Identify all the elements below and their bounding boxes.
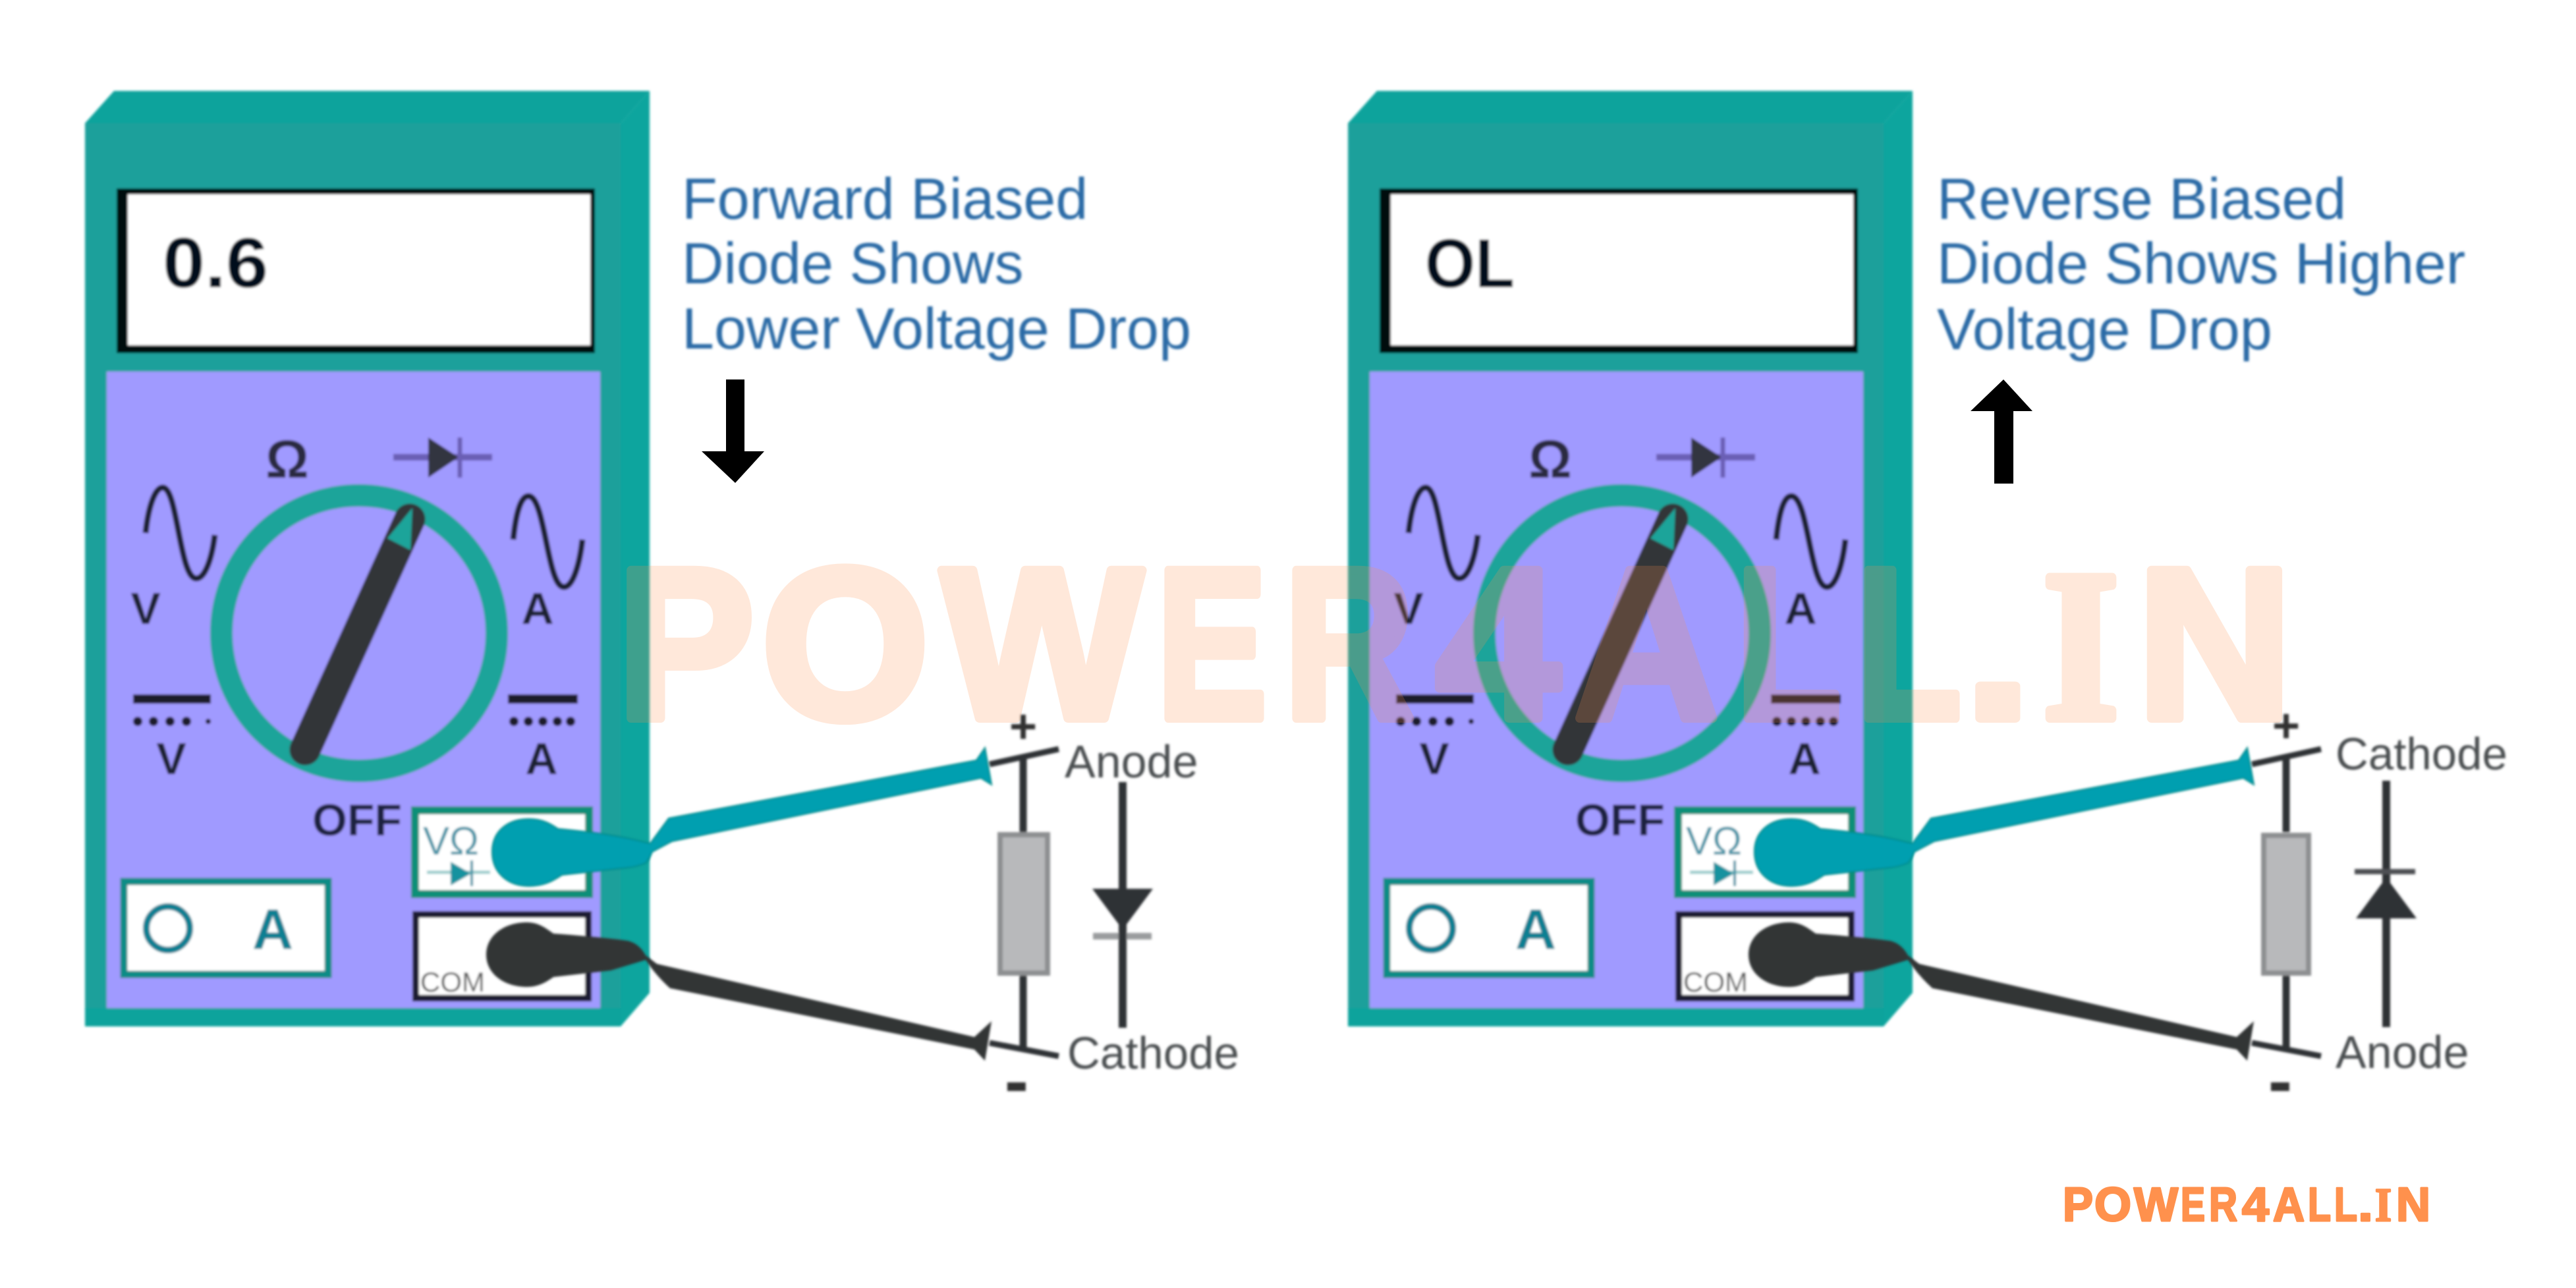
wires and resistor (990, 749, 1059, 1056)
10A socket box (124, 882, 328, 974)
DC voltage range (1396, 694, 1474, 784)
display showing OL: OL (1425, 225, 1515, 302)
DC current range: A (525, 734, 558, 784)
V-ohm socket box: VΩ (423, 819, 479, 863)
ohm symbol: Ω (1528, 430, 1572, 490)
footer brand: L (2334, 1179, 2357, 1231)
DC voltage range (133, 694, 211, 784)
Anode label: Anode (2336, 1026, 2469, 1078)
rotary dial (221, 495, 497, 771)
COM socket box: COM (1683, 966, 1748, 997)
OFF label: OFF (1575, 795, 1665, 845)
watermark: . (1964, 524, 2032, 764)
AC voltage range: V (1393, 584, 1424, 634)
AC voltage range (1393, 488, 1478, 634)
arrow: voltage down (702, 379, 764, 483)
diode range symbol (393, 437, 492, 478)
rotary dial (1484, 495, 1760, 771)
footer brand: O (2094, 1179, 2131, 1231)
AC current range: A (521, 584, 554, 634)
text: reverse biased caption: Diode Shows Higher (1937, 231, 2465, 296)
footer brand: N (2396, 1179, 2430, 1231)
watermark: 4 (1436, 524, 1561, 764)
text: reverse biased caption (1937, 166, 2465, 362)
V-ohm socket box: VΩ (1686, 819, 1742, 863)
text: forward biased caption: Forward Biased (682, 166, 1088, 231)
AC current range (1776, 496, 1845, 634)
Cathode label: Cathode (1067, 1028, 1239, 1078)
footer brand: L (2308, 1179, 2331, 1231)
watermark: L (1857, 524, 1961, 764)
footer brand: R (2209, 1179, 2237, 1231)
10A socket box (1387, 882, 1591, 974)
DC current range (1771, 694, 1841, 784)
meter body (1348, 91, 1913, 1026)
DC current range (508, 694, 578, 784)
watermark: N (2137, 524, 2292, 764)
10A socket box: A (1515, 898, 1556, 961)
Anode label: Anode (1065, 736, 1198, 787)
panel: reverse biased multimeter (1348, 91, 1913, 1026)
V-ohm socket box (1678, 810, 1852, 894)
control panel (1370, 372, 1863, 1008)
COM socket box (1679, 914, 1851, 998)
display showing 0.6: 0.6 (163, 223, 268, 302)
DC voltage range: V (156, 734, 186, 784)
text: forward biased caption: Lower Voltage Drop (682, 296, 1191, 361)
control panel (107, 372, 600, 1008)
diode symbol pointing up (2355, 781, 2417, 1027)
circuit: forward biased probes and diode (486, 700, 1239, 1121)
minus sign: - (1005, 1040, 1028, 1121)
watermark: I (2043, 526, 2119, 765)
watermark: R (1284, 524, 1414, 764)
display showing OL (1380, 188, 1858, 353)
panel: forward biased multimeter (85, 91, 650, 1026)
footer brand: E (2181, 1179, 2205, 1231)
Cathode label: Cathode (2336, 729, 2507, 779)
text: forward biased caption (682, 166, 1191, 361)
black probe plug and lead (486, 922, 992, 1061)
watermark: O (762, 524, 929, 764)
red probe plug and lead (492, 748, 992, 886)
footer brand: P (2063, 1179, 2093, 1231)
DC current range: A (1788, 734, 1821, 784)
text: forward biased caption: Diode Shows (682, 231, 1024, 296)
meter body (85, 91, 650, 1026)
diode symbol pointing down (1092, 782, 1153, 1028)
ohm symbol: Ω (266, 430, 309, 490)
OFF label: OFF (312, 795, 402, 845)
watermark: P (617, 524, 754, 764)
DC voltage range: V (1419, 734, 1449, 784)
red probe plug and lead (1754, 748, 2254, 886)
AC current range (513, 496, 582, 634)
COM socket box: COM (420, 966, 485, 997)
10A socket box: A (252, 898, 293, 961)
text: reverse biased caption: Voltage Drop (1937, 296, 2272, 362)
plus sign: + (1009, 700, 1037, 753)
arrow: voltage up (1971, 379, 2032, 484)
display showing 0.6 (117, 188, 595, 353)
footer brand: 4 (2242, 1179, 2269, 1231)
plus sign: + (2272, 700, 2300, 752)
footer brand: I (2375, 1179, 2392, 1231)
AC voltage range (130, 488, 215, 634)
wires and resistor (2252, 749, 2321, 1056)
diode range symbol (1656, 437, 1755, 478)
footer brand: A (2273, 1179, 2305, 1231)
watermark: E (1157, 524, 1267, 764)
text: reverse biased caption: Reverse Biased (1937, 166, 2346, 231)
AC current range: A (1784, 584, 1817, 634)
watermark: A (1575, 524, 1718, 764)
V-ohm socket box (415, 810, 589, 894)
minus sign: - (2268, 1040, 2292, 1121)
AC voltage range: V (130, 584, 161, 634)
footer brand: W (2134, 1179, 2178, 1231)
footer brand: . (2358, 1179, 2373, 1231)
circuit: reverse biased probes and diode (1749, 700, 2507, 1121)
black probe plug and lead (1749, 922, 2254, 1061)
watermark: L (1736, 524, 1841, 764)
COM socket box (416, 914, 588, 998)
watermark: W (941, 524, 1144, 764)
